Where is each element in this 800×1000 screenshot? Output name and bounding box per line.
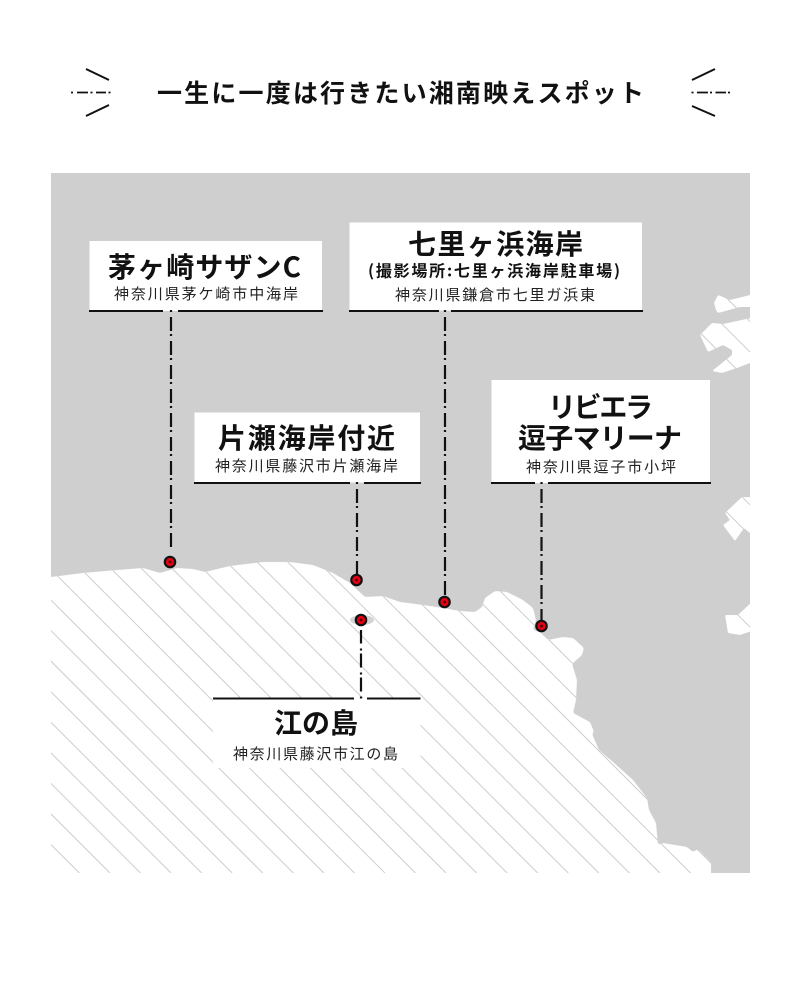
land and islands xyxy=(51,295,750,873)
marker: Zushi xyxy=(536,621,547,631)
panel: Enoshima label xyxy=(213,698,420,768)
icon: left title ornament xyxy=(71,69,110,116)
panel: Riviera Zushi Marina label: リビエラ xyxy=(548,386,653,426)
icon: Enoshima island shape xyxy=(350,615,374,625)
land hatching xyxy=(51,298,750,873)
marker: Shichirigahama xyxy=(439,597,450,607)
arrow: Enoshima leader line xyxy=(360,630,362,698)
panel: Chigasaki Southern C label: 神奈川県茅ケ崎市中海岸 xyxy=(114,283,298,304)
panel: Riviera Zushi Marina label: 逗子マリーナ xyxy=(518,417,682,457)
map xyxy=(51,173,750,873)
panel: Shichirigahama label xyxy=(349,222,643,311)
title: 一生に一度は行きたい湘南映えスポット xyxy=(157,74,644,110)
panel: Chigasaki Southern C label xyxy=(89,241,323,311)
arrow: Zushi leader line xyxy=(540,482,543,620)
panel: Riviera Zushi Marina label xyxy=(491,380,711,483)
arrow: Chigasaki leader line xyxy=(170,310,172,550)
sea background xyxy=(51,173,750,873)
panel: Katase coast label: 神奈川県藤沢市片瀬海岸 xyxy=(215,455,398,476)
marker: Enoshima xyxy=(356,615,366,625)
arrow: Katase leader line xyxy=(356,482,358,574)
panel: Shichirigahama label: (撮影場所:七里ヶ浜海岸駐車場) xyxy=(368,258,620,282)
marker: Chigasaki xyxy=(165,557,175,567)
panel: Enoshima label: 江の島 xyxy=(274,702,358,742)
panel: Riviera Zushi Marina label: 神奈川県逗子市小坪 xyxy=(526,456,676,477)
arrow: Shichirigahama leader line xyxy=(444,310,446,595)
panel: Shichirigahama label: 七里ヶ浜海岸 xyxy=(408,223,583,263)
panel: Enoshima label: 神奈川県藤沢市江の島 xyxy=(233,743,398,764)
icon: right title ornament xyxy=(692,69,730,116)
marker: Katase xyxy=(351,575,362,585)
panel: Katase coast label xyxy=(194,412,421,483)
panel: Katase coast label: 片瀬海岸付近 xyxy=(218,417,395,457)
panel: Chigasaki Southern C label: 茅ヶ崎サザンC xyxy=(108,246,301,286)
panel: Shichirigahama label: 神奈川県鎌倉市七里ガ浜東 xyxy=(395,284,595,305)
